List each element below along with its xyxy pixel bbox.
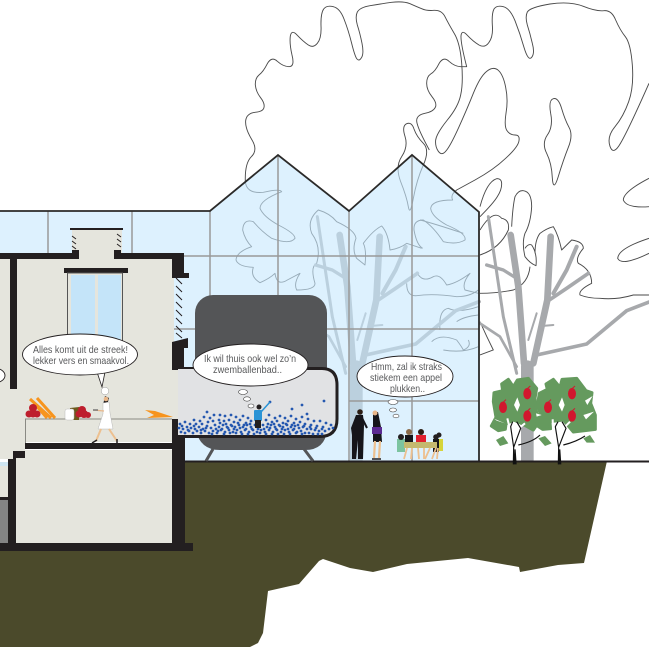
- ground line: [184, 460, 649, 462]
- apples: [499, 386, 576, 422]
- ball pit tank: [178, 295, 337, 461]
- building walls: [0, 228, 196, 551]
- speech bubble: chef: Alles komt uit de streek!: [33, 344, 128, 356]
- food: carrots right: [145, 410, 173, 418]
- apple tree trunk bases: [513, 449, 561, 464]
- speech bubble: chef: [22, 334, 138, 387]
- hatch marks: [72, 234, 182, 338]
- chef: [92, 387, 117, 443]
- speech bubble: apple: [357, 356, 453, 418]
- leaf clumps and notches: [494, 396, 595, 446]
- speech bubble: apple: Hmm, zal ik straks: [371, 361, 442, 373]
- tree branches: left tree: [309, 217, 479, 463]
- apple tree white branches: [507, 418, 570, 440]
- tree crown outlines: [236, 2, 649, 355]
- speech bubble: ball pit: [193, 344, 308, 408]
- group at table: [397, 429, 443, 459]
- speech bubble: apple: plukken..: [390, 383, 425, 395]
- tree branches: right tree: [480, 217, 649, 460]
- speech bubble: chef: lekker vers en smaakvol.: [33, 355, 129, 367]
- building interior: [0, 230, 178, 543]
- speech bubble: ball pit: zwemballenbad..: [213, 364, 282, 376]
- balls: [179, 401, 333, 434]
- apple tree canopy, right: [536, 378, 595, 432]
- speech bubble: apple: stiekem een appel: [370, 372, 442, 384]
- person in ball pit: [254, 402, 270, 428]
- food: bread and apples: [65, 406, 91, 420]
- apple tree canopy, left: [491, 378, 541, 431]
- speech bubble: ball pit: Ik wil thuis ook wel zo’n: [204, 353, 296, 365]
- speech bubble: cut off at left: [0, 368, 5, 383]
- apple trees: [491, 378, 595, 464]
- glass greenhouse: [0, 155, 479, 461]
- businesswoman: [372, 410, 382, 459]
- ground: [0, 461, 607, 647]
- food: apples and carrots left: [26, 398, 55, 418]
- apple tree trunks: [511, 422, 585, 464]
- window: [64, 268, 128, 343]
- businessman: [351, 409, 367, 459]
